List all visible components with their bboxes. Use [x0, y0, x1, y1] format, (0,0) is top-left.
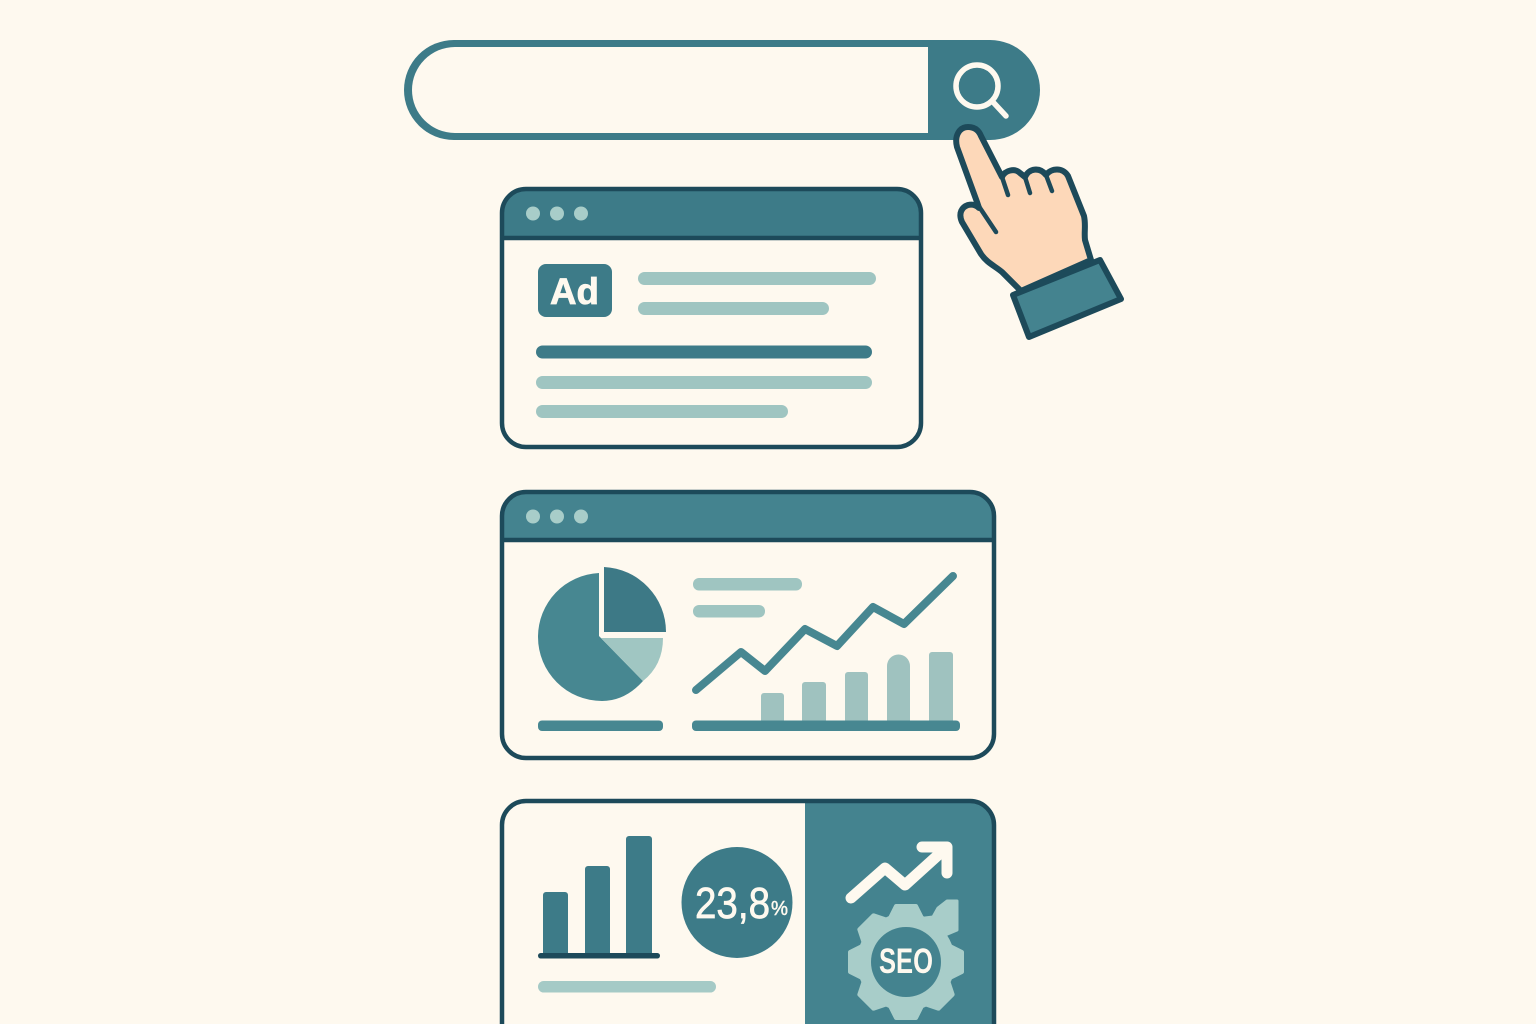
line chart — [696, 576, 953, 690]
window header — [502, 492, 994, 540]
percentage badge: % — [771, 898, 788, 920]
panel: analytics browser window — [502, 492, 994, 758]
search bar — [404, 40, 1040, 140]
bar chart — [543, 836, 652, 954]
legend lines — [693, 578, 802, 618]
percentage badge: 23,8 — [695, 879, 770, 928]
pie chart — [538, 567, 666, 701]
ad badge: Ad — [550, 271, 599, 312]
bar chart — [761, 652, 953, 722]
hand cuff — [1013, 260, 1121, 337]
icon: pointing hand — [956, 127, 1121, 337]
ad text lines — [536, 272, 876, 418]
icon: magnifying glass — [956, 65, 1006, 116]
percentage badge — [682, 847, 792, 958]
chart baseline — [538, 953, 660, 958]
ad badge — [538, 264, 612, 317]
chart baselines — [538, 720, 960, 731]
icon: SEO gear: SEO — [879, 942, 933, 981]
window dots — [526, 206, 588, 220]
window header — [502, 189, 921, 238]
icon: SEO gear — [850, 901, 962, 1018]
icon: rising arrow — [851, 847, 947, 898]
window dots — [526, 510, 588, 524]
teal side panel — [805, 801, 994, 1024]
panel: ad browser window — [502, 189, 921, 447]
caption line — [538, 981, 716, 992]
panel: SEO browser window — [502, 801, 994, 1024]
